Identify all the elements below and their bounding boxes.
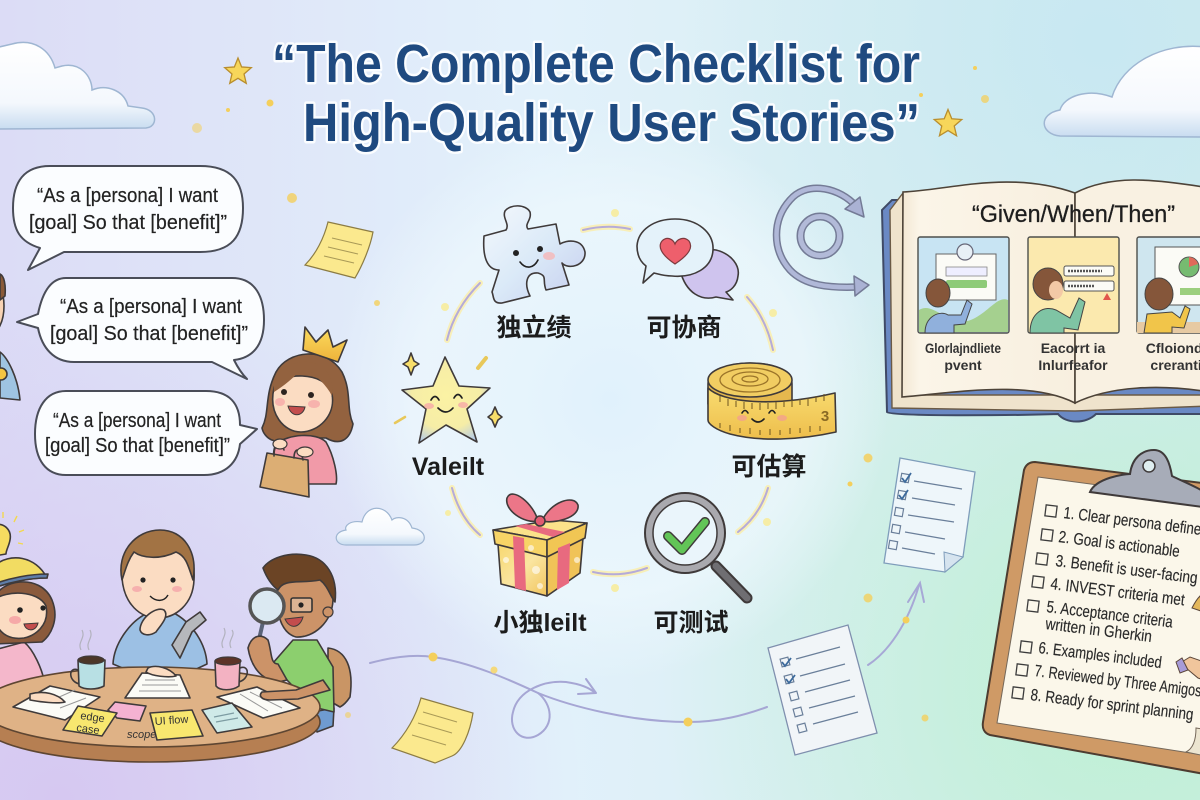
cycle arrows xyxy=(776,188,869,296)
body xyxy=(274,435,337,484)
table papers and notes: case xyxy=(76,722,100,737)
panel captions: Glorlajndliete xyxy=(925,340,1001,356)
label: valuable: Valeilt xyxy=(412,453,485,481)
clip xyxy=(1090,450,1200,508)
left page xyxy=(902,182,1075,403)
shopping bag xyxy=(260,453,309,497)
speech bubble 3: [goal] So that [benefit]” xyxy=(45,435,230,457)
sticky note: lower xyxy=(392,698,473,763)
panel 1: given xyxy=(918,237,1009,333)
handshake icon xyxy=(1176,657,1200,682)
panel captions xyxy=(925,340,1200,373)
panel 3: then xyxy=(1137,237,1200,333)
title xyxy=(272,34,920,153)
table papers and notes xyxy=(13,666,330,741)
page edges xyxy=(890,193,1200,411)
book cover xyxy=(882,200,1200,422)
curved arrow to upper checklist xyxy=(868,583,924,665)
speech bubble 2: “As a [persona] I want xyxy=(60,296,242,318)
icon: gift box xyxy=(493,494,587,596)
table papers and notes: UI flow xyxy=(154,714,189,728)
speech bubble 3: “As a [persona] I want xyxy=(53,410,221,432)
book heading: “Given/When/Then” xyxy=(972,201,1175,228)
speech bubble 1: “As a [persona] I want xyxy=(37,185,218,207)
princess character with crown and bag xyxy=(260,327,353,497)
partial character at left edge xyxy=(0,274,20,400)
label: independent: 独立绩 xyxy=(496,314,572,342)
icon: magnifier with check xyxy=(645,493,747,598)
clipboard checklist: 6. Examples included xyxy=(1038,639,1163,672)
person: middle with wrench xyxy=(113,530,207,672)
cloud: top left xyxy=(0,42,155,129)
label: estimable: 可估算 xyxy=(731,453,807,481)
label: small: 小独leilt xyxy=(493,609,587,637)
cloud: middle xyxy=(336,508,424,545)
floating checklist: lower xyxy=(768,625,877,755)
team around table xyxy=(0,512,351,762)
table papers and notes: scope xyxy=(127,729,156,741)
title: “The Complete Checklist for xyxy=(272,34,920,94)
small bell icon xyxy=(1192,596,1200,612)
right page xyxy=(1075,180,1200,403)
person: right with magnifier xyxy=(248,554,351,732)
paper xyxy=(997,477,1200,756)
clipboard checklist xyxy=(983,450,1200,775)
paper curl xyxy=(1186,728,1200,757)
table papers and notes: edge xyxy=(80,710,105,725)
cups xyxy=(71,628,247,690)
label: testable: 可测试 xyxy=(653,609,729,637)
journey path arrow xyxy=(370,652,767,738)
panel 2: when xyxy=(1028,237,1119,333)
icon: puzzle piece xyxy=(484,206,585,303)
face xyxy=(273,376,333,432)
speech bubble 2: [goal] So that [benefit]” xyxy=(50,323,248,345)
sticky note: upper xyxy=(305,222,373,278)
open book: Given/When/Then xyxy=(882,180,1200,422)
speech bubble 1: [goal] So that [benefit]” xyxy=(29,212,227,234)
label: negotiable: 可协商 xyxy=(646,314,722,342)
panel captions: Eacorrt ia xyxy=(1041,340,1106,356)
checklist rows xyxy=(1012,505,1057,699)
speech bubble 2 xyxy=(17,278,264,379)
icon: smiling star xyxy=(395,353,502,443)
icon: chat bubbles with heart xyxy=(637,219,738,300)
floating checklist: upper xyxy=(884,458,975,572)
speech bubble 1 xyxy=(13,166,243,270)
hair xyxy=(262,354,353,442)
clipboard checklist: written in Gherkin xyxy=(1044,615,1153,646)
INVEST cycle connector arcs xyxy=(441,209,777,592)
table xyxy=(0,682,320,762)
icon: measuring tape: 3 xyxy=(821,408,829,425)
speech bubble 3 xyxy=(35,391,257,475)
panel captions: pvent xyxy=(944,357,982,373)
person: left with hat and bulb xyxy=(0,512,55,710)
crown xyxy=(303,327,347,362)
icon: measuring tape xyxy=(708,363,836,439)
title: High-Quality User Stories” xyxy=(303,93,920,153)
panel captions: Inlurfeafor xyxy=(1038,357,1108,373)
board xyxy=(983,462,1200,775)
decorative stars and sparkles xyxy=(192,58,989,722)
clipboard checklist: 5. Acceptance criteria xyxy=(1046,598,1174,632)
cloud: top right xyxy=(1044,46,1200,137)
